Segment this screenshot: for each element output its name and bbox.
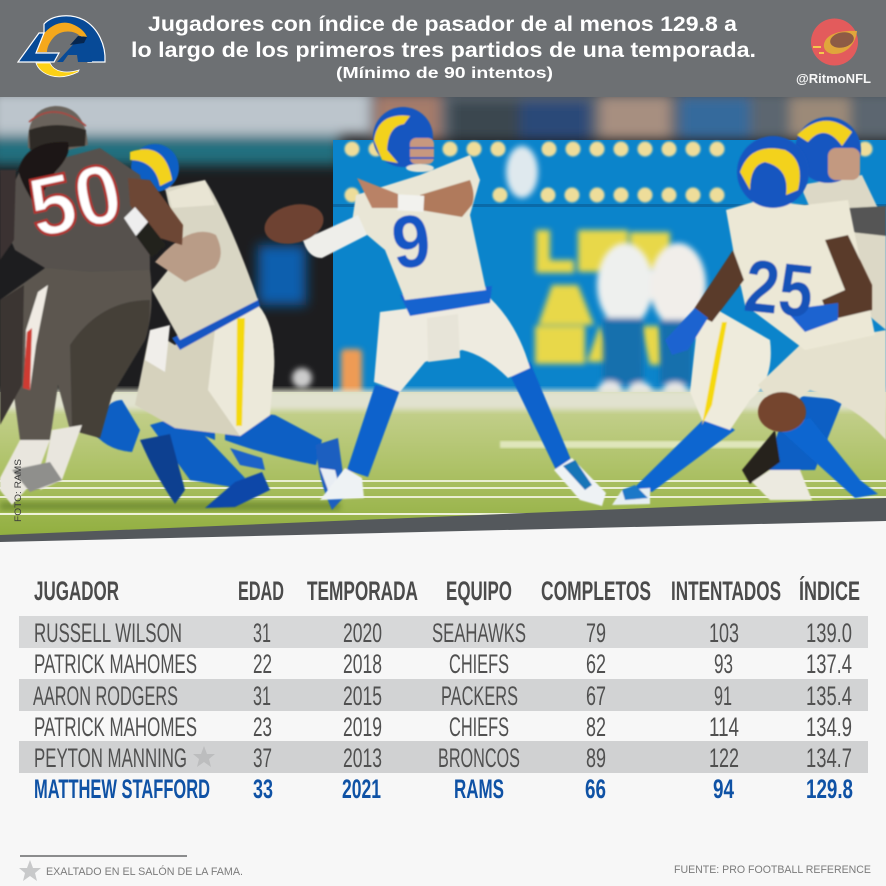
photo credit: FOTO: RAMS [13,459,24,522]
table header row: EQUIPO [446,576,512,606]
row: Matthew Stafford highlighted: 2021 [342,774,381,804]
jersey number 50: 50 [20,145,130,256]
row: Russell Wilson [19,616,868,648]
table header row: EDAD [238,576,284,606]
stadium background [0,90,886,397]
row: Aaron Rodgers: 2015 [343,681,382,711]
row: Patrick Mahomes 2018: 22 [253,649,272,679]
row: Matthew Stafford highlighted: 66 [585,774,606,804]
header bar [0,0,886,97]
row: Russell Wilson: RUSSELL WILSON [34,618,182,648]
row: Patrick Mahomes 2019: 23 [253,712,272,742]
row: Matthew Stafford highlighted [34,774,853,804]
photo: Rams quarterback passing [0,90,886,542]
player: Buccaneers number 50 [0,106,183,505]
player: Rams lineman 55 [92,144,346,510]
row: Russell Wilson: SEAHAWKS [432,618,526,648]
row: Matthew Stafford highlighted: 33 [253,774,273,804]
row: Peyton Manning: 89 [586,743,606,773]
row: Matthew Stafford highlighted: RAMS [454,774,504,804]
row: Patrick Mahomes 2019: 134.9 [806,712,852,742]
row: Matthew Stafford highlighted: 94 [713,774,734,804]
row: Russell Wilson: 79 [586,618,606,648]
row: Patrick Mahomes 2018: CHIEFS [449,649,509,679]
row: Peyton Manning: PEYTON MANNING [34,743,187,773]
title: (Mínimo de 90 intentos) [336,65,553,82]
helmet: Rams running back [737,136,809,208]
row: Peyton Manning: 2013 [343,743,382,773]
row: Russell Wilson: 139.0 [806,618,852,648]
LED board and blue wall [333,140,886,392]
row: Patrick Mahomes 2019: 2019 [343,712,382,742]
helmet: Buccaneers [28,106,88,152]
row: Patrick Mahomes 2018: 93 [714,649,733,679]
icon: Ritmo NFL football [811,18,858,66]
table header row [34,575,860,606]
title: Jugadores con índice de pasador de al menos 129.8 a [148,13,737,36]
row: Patrick Mahomes 2018 [34,649,852,679]
source note: FUENTE: PRO FOOTBALL REFERENCE [674,864,871,876]
slanted dark band [0,498,886,542]
football [264,204,324,245]
footnote: Hall of Fame [19,855,243,881]
row: Aaron Rodgers: AARON RODGERS [33,681,178,711]
title [131,13,756,82]
row: Aaron Rodgers: 31 [253,681,271,711]
row: Patrick Mahomes 2019: 82 [586,712,606,742]
row: Russell Wilson: 31 [253,618,271,648]
title: lo largo de los primeros tres partidos de una temporada. [131,39,756,62]
row: Patrick Mahomes 2018: PATRICK MAHOMES [34,649,197,679]
row: Aaron Rodgers: 135.4 [806,681,852,711]
player: Rams quarterback 9 [260,107,606,506]
table header row: COMPLETOS [541,576,651,606]
blurred figures in front of wall [292,243,706,400]
dreadlocks [18,142,69,205]
row: Peyton Manning: 134.7 [806,743,852,773]
row: Russell Wilson: 2020 [343,618,382,648]
jersey number 9: 9 [388,198,434,285]
logo: Los Angeles Rams [18,16,105,77]
row: Patrick Mahomes 2018: 62 [586,649,606,679]
jersey number 25: 25 [741,244,817,333]
row: Patrick Mahomes 2019: CHIEFS [449,712,509,742]
row: Peyton Manning [19,741,868,773]
footnote: Hall of Fame: EXALTADO EN EL SALÓN DE LA FAMA. [46,865,243,878]
football field [0,390,886,542]
row: Patrick Mahomes 2018: 137.4 [806,649,852,679]
row: Aaron Rodgers: 91 [714,681,732,711]
row: Matthew Stafford highlighted: 129.8 [806,774,853,804]
table header row: TEMPORADA [307,576,418,606]
row: Patrick Mahomes 2019: PATRICK MAHOMES [34,712,197,742]
handle: @RitmoNFL [796,71,871,86]
row: Russell Wilson: 103 [709,618,739,648]
player: Rams running back 25 [612,136,886,505]
helmet: Rams quarterback [373,107,434,172]
row: Peyton Manning: BRONCOS [438,743,520,773]
row: Patrick Mahomes 2019: 114 [709,712,739,742]
row: Peyton Manning: 37 [253,743,272,773]
row: Matthew Stafford highlighted: MATTHEW STAFFORD [34,774,210,804]
row: Aaron Rodgers: 67 [586,681,606,711]
table [19,575,868,804]
row: Aaron Rodgers: PACKERS [441,681,518,711]
blurred yellow wall letters [535,230,670,365]
row: Aaron Rodgers [19,679,868,711]
player: Rams behind, helmet and shoulder [742,117,886,500]
table header row: JUGADOR [34,576,119,606]
row: Patrick Mahomes 2019 [34,712,852,742]
row: Peyton Manning: 122 [709,743,739,773]
row: Patrick Mahomes 2018: 2018 [343,649,382,679]
table header row: INTENTADOS [671,576,781,606]
